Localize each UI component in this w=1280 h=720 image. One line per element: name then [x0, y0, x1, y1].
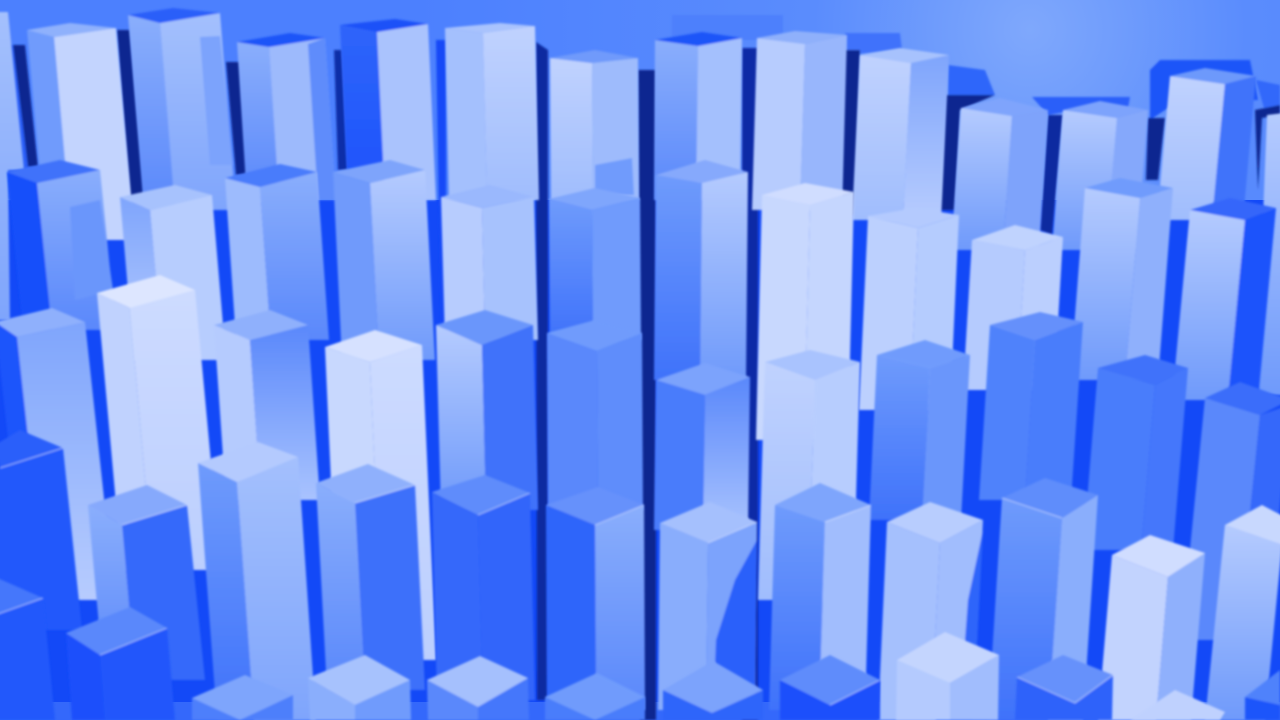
bar 5-5	[545, 673, 645, 720]
bar 3-5	[547, 320, 643, 510]
bar 3-0	[0, 308, 115, 600]
bar chart: front row	[0, 577, 1280, 720]
bar 5-2	[192, 675, 293, 720]
bar 2-10	[1070, 178, 1173, 380]
bar 1-5	[445, 23, 539, 200]
bar 5-6	[663, 661, 763, 720]
bar 1-4	[340, 19, 436, 200]
bar 5-0	[0, 577, 55, 720]
bar 4-1	[88, 485, 205, 680]
bar 2-11	[1172, 198, 1276, 400]
floor shadow band	[0, 200, 1280, 720]
bar 2-9	[963, 225, 1063, 390]
bar 5-3	[308, 655, 411, 720]
bar 2-6	[654, 160, 748, 380]
bar 4-3	[316, 464, 425, 690]
bar 2-8	[859, 208, 959, 410]
bar 5-8	[896, 632, 999, 720]
bar 3-11	[1181, 382, 1280, 640]
bar 1-3	[237, 33, 336, 200]
bar 3-8	[869, 340, 970, 520]
bar 3-10	[1083, 355, 1188, 550]
bar chart: back row	[0, 8, 1280, 395]
bar 5-4	[427, 656, 529, 720]
bar 4-6	[658, 502, 757, 710]
bar 1-1	[27, 23, 135, 240]
bar 1-0	[0, 12, 24, 320]
bar chart: fourth row	[0, 430, 1280, 720]
bar 3-3	[325, 330, 436, 660]
bar 4-5	[546, 487, 645, 710]
bar 4-4	[432, 475, 535, 700]
bar 1-8	[752, 31, 847, 210]
bar 5-1	[66, 607, 175, 720]
bar 4-7	[769, 483, 871, 710]
bar 2-2	[225, 164, 329, 340]
bar 2-5	[549, 188, 641, 340]
bar 5-10	[1130, 690, 1225, 720]
bar 3-1	[97, 275, 221, 570]
bar 5-9	[1015, 655, 1113, 720]
bar 2-7	[756, 183, 854, 440]
floor strip along the bottom edge	[0, 702, 1280, 720]
bar 4-0	[0, 430, 82, 630]
bar 3-6	[654, 363, 750, 530]
bar 3-4	[436, 310, 538, 510]
bar 2-0	[7, 160, 116, 330]
bar 2-4	[441, 185, 538, 340]
bar 1-12	[1157, 68, 1256, 220]
bar chart: second row	[7, 160, 1276, 440]
bar 2-1	[120, 185, 226, 360]
bar 1-2	[128, 8, 236, 210]
bar 4-11	[1205, 505, 1280, 720]
bar 4-8	[878, 502, 983, 720]
bar 4-9	[988, 478, 1098, 720]
bar 1-10	[951, 98, 1048, 250]
bar 4-10	[1098, 535, 1205, 720]
bar 5-7	[780, 655, 880, 720]
bar 2-3	[333, 160, 435, 360]
bar 3-7	[758, 350, 860, 600]
bar 1-7	[654, 32, 742, 200]
bar 4-2	[198, 442, 316, 720]
bar 1-9	[852, 48, 949, 220]
bar 1-11	[1052, 101, 1148, 250]
bar 1-13	[1256, 113, 1280, 395]
bar chart: third row	[0, 275, 1280, 660]
bar 5-11	[1245, 670, 1280, 720]
bar 1-6	[550, 50, 639, 200]
bar 3-2	[214, 310, 320, 500]
bar 3-9	[979, 312, 1083, 500]
